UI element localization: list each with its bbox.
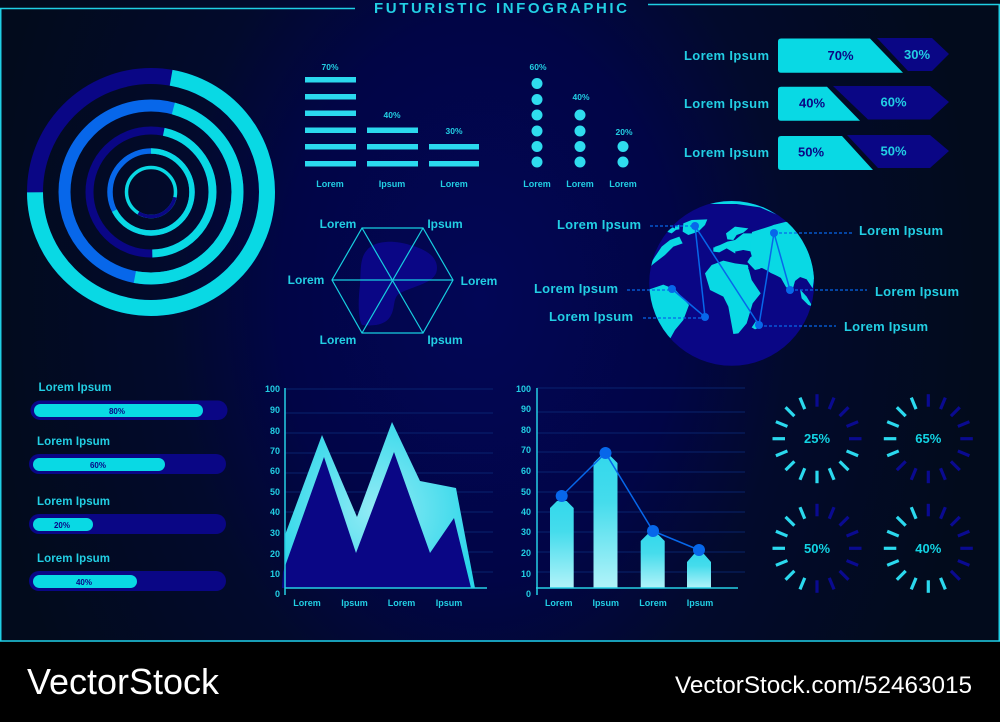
footer image id: VectorStock.com/52463015 — [675, 672, 972, 699]
radar chart: Lorem — [320, 217, 356, 231]
progress bars — [29, 382, 228, 591]
dot column chart: 20% — [615, 127, 633, 137]
bar and line chart: 40 — [521, 507, 531, 517]
progress bar 40%: Lorem Ipsum — [37, 553, 110, 565]
world globe map: Lorem Ipsum — [859, 223, 943, 238]
area chart: 90 — [270, 405, 280, 415]
trend line — [556, 447, 705, 556]
bar and line chart: 0 — [526, 589, 531, 599]
radar chart: Lorem — [461, 274, 497, 288]
area chart: 0 — [275, 589, 280, 599]
stacked line bars chart — [305, 62, 479, 189]
stacked line bars chart: Lorem — [316, 179, 344, 189]
bar and line chart: Ipsum — [592, 598, 619, 608]
radial dial 40% — [884, 504, 973, 593]
arrow bar: 40/60: 60% — [880, 94, 907, 110]
stacked line bars chart: Lorem — [440, 179, 468, 189]
progress bar 60% — [29, 436, 226, 474]
arrow bar: 70/30: 30% — [904, 47, 930, 62]
inland seas — [713, 246, 770, 273]
bar and line chart — [516, 384, 745, 608]
dot column chart: Lorem — [566, 179, 594, 189]
area chart: 30 — [270, 528, 280, 538]
connection lines — [672, 226, 790, 325]
radial dial 50% — [772, 504, 862, 593]
radial dial 40%: 40% — [915, 541, 942, 556]
dot column chart: Lorem — [523, 179, 551, 189]
area chart: 20 — [270, 549, 280, 559]
radar chart: Lorem — [288, 273, 324, 287]
bar and line chart: 20 — [521, 548, 531, 558]
split arrow bars — [684, 38, 949, 170]
progress bar 80%: 80% — [109, 407, 125, 416]
radar chart: Ipsum — [427, 217, 463, 231]
area chart: 40 — [270, 507, 280, 517]
bar and line chart: 50 — [521, 487, 531, 497]
radial dial 65% — [884, 394, 973, 483]
area chart: 80 — [270, 426, 280, 436]
world globe map: Lorem Ipsum — [844, 319, 928, 334]
radar blob — [359, 242, 437, 325]
radar chart: Lorem — [320, 333, 356, 347]
bar and line chart: 90 — [521, 404, 531, 414]
arrow bar: 50/50 — [684, 135, 949, 170]
world globe map: Lorem Ipsum — [875, 284, 959, 299]
dot column chart — [523, 62, 637, 189]
world globe map — [534, 200, 959, 366]
area chart: Ipsum — [436, 598, 462, 608]
arrow bar: 70/30 — [684, 38, 949, 73]
radar hexagon — [332, 228, 453, 333]
progress bar 60%: Lorem Ipsum — [37, 436, 110, 448]
footer strip — [0, 642, 1000, 722]
arrow bar: 40/60 — [684, 86, 949, 121]
bar and line chart: 60 — [521, 466, 531, 476]
area chart: Ipsum — [341, 598, 368, 608]
arrow bar: 70/30: 70% — [827, 48, 854, 63]
progress bar 80% — [30, 382, 228, 420]
bar and line chart: Ipsum — [687, 598, 713, 608]
bar and line chart: 100 — [516, 384, 531, 394]
area chart: 100 — [265, 384, 280, 394]
concentric ring chart — [35, 76, 267, 308]
bar and line chart: 10 — [521, 569, 531, 579]
bar and line chart: 70 — [521, 445, 531, 455]
stacked line bars chart: 30% — [445, 126, 463, 136]
dot column chart: 60% — [529, 62, 547, 72]
progress bar 40% — [29, 553, 226, 591]
world globe map: Lorem Ipsum — [549, 309, 633, 324]
stacked line bars chart: Ipsum — [379, 179, 405, 189]
radial dial 25%: 25% — [804, 431, 830, 446]
arrow bar: 50/50: 50% — [880, 144, 907, 158]
area chart: 60 — [270, 466, 280, 476]
dot column chart: 40% — [572, 92, 590, 102]
progress bar 20%: 20% — [54, 521, 70, 530]
dot column chart: Lorem — [609, 179, 637, 189]
bar and line chart: Lorem — [545, 598, 572, 608]
bar and line chart: 30 — [521, 527, 531, 537]
arrow bar: 70/30: Lorem Ipsum — [684, 48, 769, 63]
area chart: Lorem — [293, 598, 321, 608]
stacked line bars chart: 40% — [383, 110, 401, 120]
radial dial 65%: 65% — [915, 431, 942, 446]
area chart: Lorem — [388, 598, 415, 608]
radar chart: Ipsum — [427, 333, 463, 347]
world globe map: Lorem Ipsum — [534, 281, 618, 296]
area chart — [265, 384, 493, 608]
progress bar 80%: Lorem Ipsum — [38, 382, 112, 394]
world globe map: Lorem Ipsum — [557, 217, 641, 232]
arrow bar: 40/60: Lorem Ipsum — [684, 96, 769, 111]
stacked line bars chart: 70% — [321, 62, 339, 72]
progress bar 60%: 60% — [90, 461, 106, 470]
progress bar 20% — [29, 496, 226, 534]
radar chart — [288, 217, 497, 347]
area chart: 50 — [270, 487, 280, 497]
area series front — [282, 452, 471, 588]
radial dial 25% — [772, 394, 862, 483]
area chart: 10 — [270, 569, 280, 579]
title: FUTURISTIC INFOGRAPHIC — [374, 0, 627, 17]
continents — [647, 200, 820, 339]
radial dial 50%: 50% — [804, 541, 830, 556]
area chart: 70 — [270, 446, 280, 456]
area series back — [285, 422, 475, 588]
arrow bar: 50/50: 50% — [798, 144, 824, 160]
footer logo text: VectorStock — [27, 661, 220, 702]
progress bar 20%: Lorem Ipsum — [37, 496, 110, 508]
bar and line chart: 80 — [521, 425, 531, 435]
arrow bar: 40/60: 40% — [799, 96, 825, 110]
bar and line chart: Lorem — [639, 598, 667, 608]
asia landmass — [750, 222, 814, 292]
arrow bar: 50/50: Lorem Ipsum — [684, 145, 769, 160]
bars — [550, 456, 711, 588]
progress bar 40%: 40% — [76, 578, 92, 587]
